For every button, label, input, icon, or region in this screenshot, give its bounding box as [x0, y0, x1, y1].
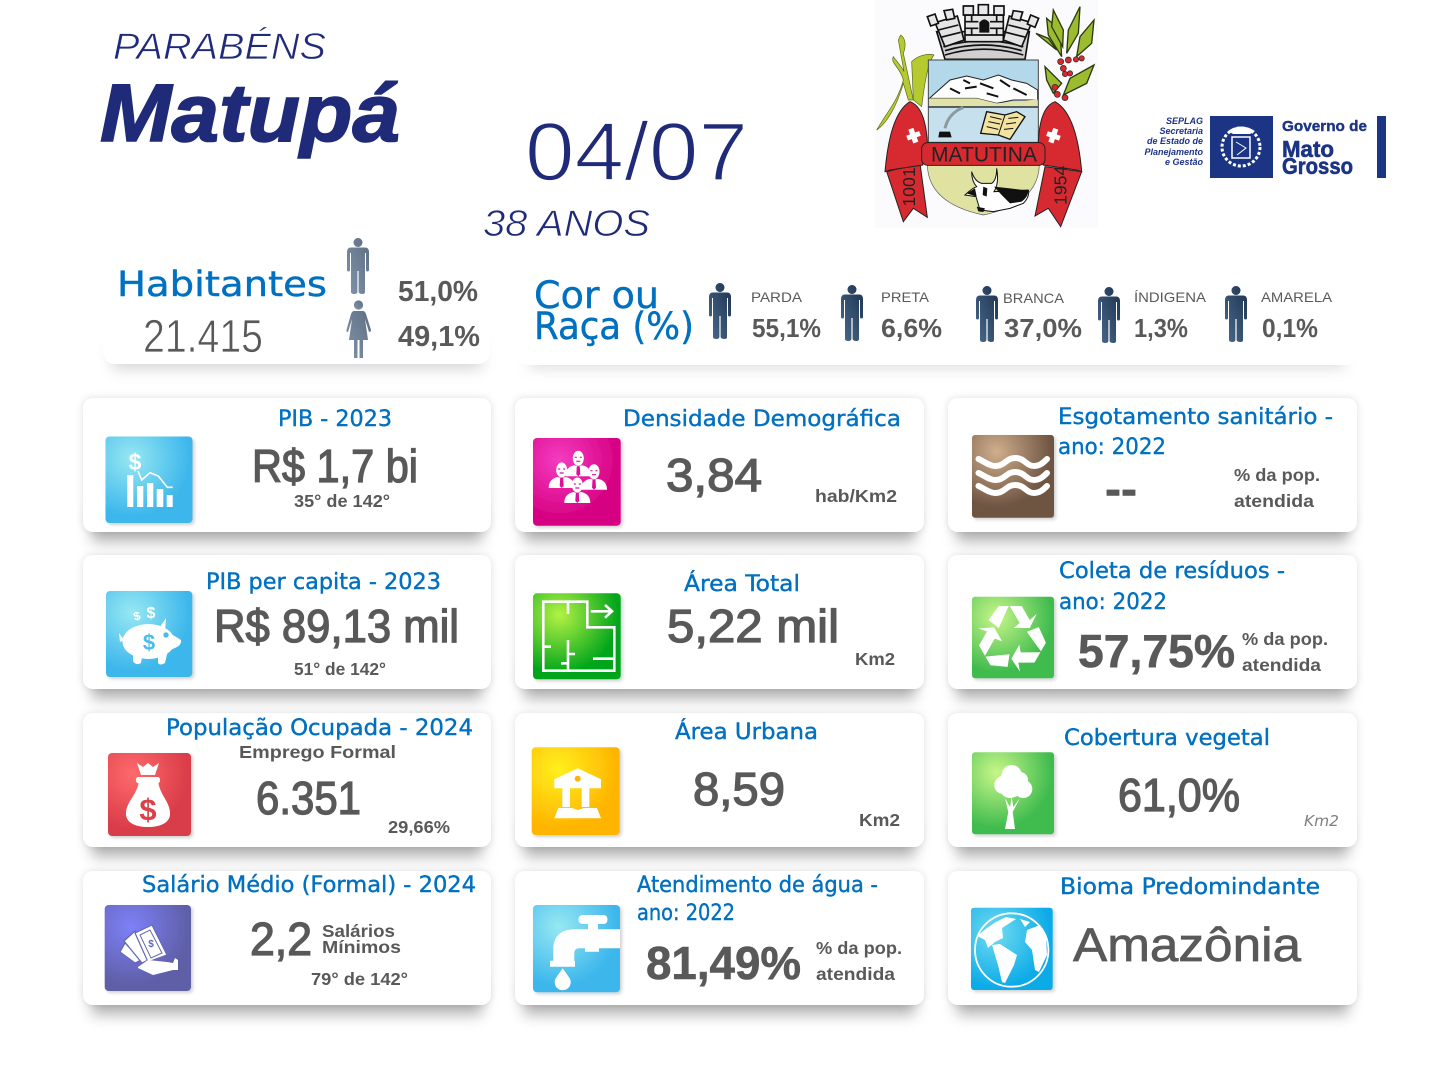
value: 61,0%: [1118, 769, 1240, 821]
item: indígena: 1,3%: [1134, 313, 1188, 343]
date: 04/07: [525, 105, 748, 198]
unit: [816, 938, 902, 984]
SEPLAG text: Planejamento: [1144, 147, 1203, 157]
item: parda: 55,1%: [752, 313, 821, 343]
logo: municipal coat of arms: 1954: [1051, 165, 1071, 205]
icon: man: [347, 238, 369, 294]
icon: chart: [106, 436, 192, 523]
heading: Bioma Predomindante: [1060, 875, 1320, 900]
logo: municipal coat of arms: 1001: [899, 167, 919, 207]
SEPLAG text: de Estado de: [1147, 136, 1203, 146]
icon: piggy bank: $: [143, 630, 155, 655]
unit: hab/Km2: [815, 486, 897, 506]
heading: ano: 2022: [637, 901, 735, 926]
value: 5,22 mil: [667, 600, 839, 652]
crown: [927, 5, 1039, 59]
heading: [534, 274, 694, 348]
icon: recycle: [971, 597, 1054, 678]
card: Densidade Demográfica: [515, 398, 924, 542]
unit: [1234, 465, 1320, 511]
value: 3,84: [666, 449, 762, 501]
icon: piggy bank: $: [132, 608, 142, 624]
panel: Habitantes: [103, 238, 490, 369]
ribbon text: MATUTINA: [931, 143, 1038, 167]
item: parda: PARDA: [751, 289, 803, 305]
coffee branch: [1036, 7, 1094, 95]
unit: atendida: [816, 964, 895, 984]
heading: [637, 873, 878, 926]
value: Amazônia: [1073, 918, 1302, 971]
unit: atendida: [1234, 491, 1314, 511]
unit: Mínimos: [322, 937, 401, 957]
item: amarela: AMARELA: [1261, 289, 1333, 305]
item: preta: [841, 285, 942, 343]
logo: Governo de Mato Grosso / SEPLAG: Mato: [1282, 136, 1334, 162]
unit: Km2: [859, 810, 900, 830]
heading: Área Total: [684, 571, 800, 597]
item: amarela: [1225, 286, 1333, 343]
subheading: Emprego Formal: [239, 742, 396, 762]
icon: people: [533, 438, 621, 526]
rank: 79° de 142°: [311, 969, 408, 989]
value: 81,49%: [646, 937, 801, 989]
card: População Ocupada: [83, 713, 491, 857]
shield: [928, 60, 1038, 107]
icon: money in hand: [105, 905, 191, 991]
heading: Cor ou: [534, 274, 659, 317]
unit: % da pop.: [1242, 629, 1328, 649]
cow: [965, 168, 1029, 212]
unit: Salários: [322, 921, 395, 941]
card: Salário Médio: [83, 871, 491, 1015]
card: Coleta de resíduos: [948, 555, 1357, 699]
value: --: [1105, 463, 1137, 515]
SEPLAG text: [1144, 116, 1203, 167]
unit: [322, 921, 401, 957]
icon: piggy bank: $: [147, 605, 156, 622]
value: 21.415: [143, 310, 263, 362]
value: R$ 1,7 bi: [252, 440, 418, 492]
card: Atendimento de água: [515, 871, 924, 1015]
unit: [1242, 629, 1328, 675]
value: 57,75%: [1078, 625, 1235, 677]
heading: Salário Médio (Formal) - 2024: [142, 873, 476, 898]
item: preta: PRETA: [881, 289, 930, 305]
heading: Atendimento de água -: [637, 873, 878, 898]
item: preta: 6,6%: [881, 313, 942, 343]
panel: Cor ou Raça: [515, 262, 1357, 368]
icon: globe: [971, 908, 1053, 990]
male share: 51,0%: [398, 276, 478, 308]
icon: chart: $: [129, 449, 142, 475]
heading: ano: 2022: [1058, 435, 1166, 460]
SEPLAG text: e Gestão: [1165, 157, 1203, 167]
value: 2,2: [250, 913, 312, 965]
card: Bioma Predominante: [948, 871, 1357, 1015]
heading: Densidade Demográfica: [623, 407, 901, 432]
heading: Cobertura vegetal: [1064, 726, 1270, 751]
unit: Km2: [855, 649, 895, 669]
ribbon: [885, 102, 1082, 227]
icon: waves: [972, 435, 1054, 518]
logo: Governo de Mato Grosso / SEPLAG: Grosso: [1282, 153, 1353, 179]
heading: PIB - 2023: [278, 407, 392, 432]
heading: PARABÉNS: PARABÉNS: [113, 26, 326, 67]
icon: tree: [972, 752, 1054, 834]
heading: População Ocupada - 2024: [166, 716, 473, 741]
SEPLAG text: Secretaria: [1159, 126, 1203, 136]
item: branca: 37,0%: [1004, 313, 1082, 343]
female share: 49,1%: [398, 321, 480, 353]
card: PIB per capita: [83, 555, 491, 699]
unit: % da pop.: [816, 938, 902, 958]
value: R$ 89,13 mil: [214, 600, 459, 652]
value: 6.351: [256, 772, 361, 824]
rank: 35° de 142°: [294, 491, 390, 511]
heading: Área Urbana: [675, 719, 818, 745]
heading: Raça (%): [534, 305, 694, 348]
icon: building: [532, 747, 620, 835]
corn: [877, 35, 913, 130]
SEPLAG text: SEPLAG: [1166, 116, 1203, 126]
item: branca: BRANCA: [1003, 290, 1065, 306]
value: 8,59: [693, 763, 785, 815]
heading: PIB per capita - 2023: [206, 570, 441, 595]
heading: Habitantes: [117, 265, 327, 305]
card: Esgotamento sanitário: [948, 398, 1357, 542]
heading: [1058, 405, 1333, 460]
item: indígena: ÍNDIGENA: [1134, 289, 1207, 305]
anniversary: 38 anos: 38 ANOS: [483, 203, 650, 244]
icon: money in hand: $: [148, 939, 154, 950]
unit: atendida: [1242, 655, 1321, 675]
icon: money bag: $: [139, 792, 157, 827]
heading: ano: 2022: [1059, 590, 1167, 615]
unit: % da pop.: [1234, 465, 1320, 485]
logo: Governo de Mato Grosso / SEPLAG: Governo de: [1282, 118, 1367, 135]
lower field: [927, 165, 1039, 215]
icon: piggy bank: [106, 591, 192, 677]
item: parda: [709, 283, 821, 343]
heading: Coleta de resíduos -: [1059, 559, 1285, 584]
card: Área Total: [515, 555, 924, 699]
unit: Km2: [1304, 812, 1339, 830]
card: Área Urbana: [515, 713, 924, 857]
item: amarela: 0,1%: [1262, 313, 1318, 343]
rank: 51° de 142°: [294, 659, 386, 679]
icon: woman: [346, 300, 371, 358]
logo: Governo de Mato Grosso / SEPLAG: [1144, 116, 1386, 179]
heading: [1059, 559, 1285, 615]
title: Matupá: Matupá: [100, 68, 400, 159]
card: PIB: [83, 398, 491, 542]
icon: money bag: [108, 753, 191, 836]
icon: floor plan: [533, 593, 621, 679]
item: indígena: [1098, 287, 1207, 343]
icon: water tap: [533, 905, 620, 992]
card: Cobertura vegetal: [948, 713, 1357, 857]
percentage: 29,66%: [388, 817, 450, 837]
item: branca: [976, 286, 1082, 343]
heading: Esgotamento sanitário -: [1058, 405, 1333, 430]
logo: municipal coat of arms: [875, 0, 1098, 228]
